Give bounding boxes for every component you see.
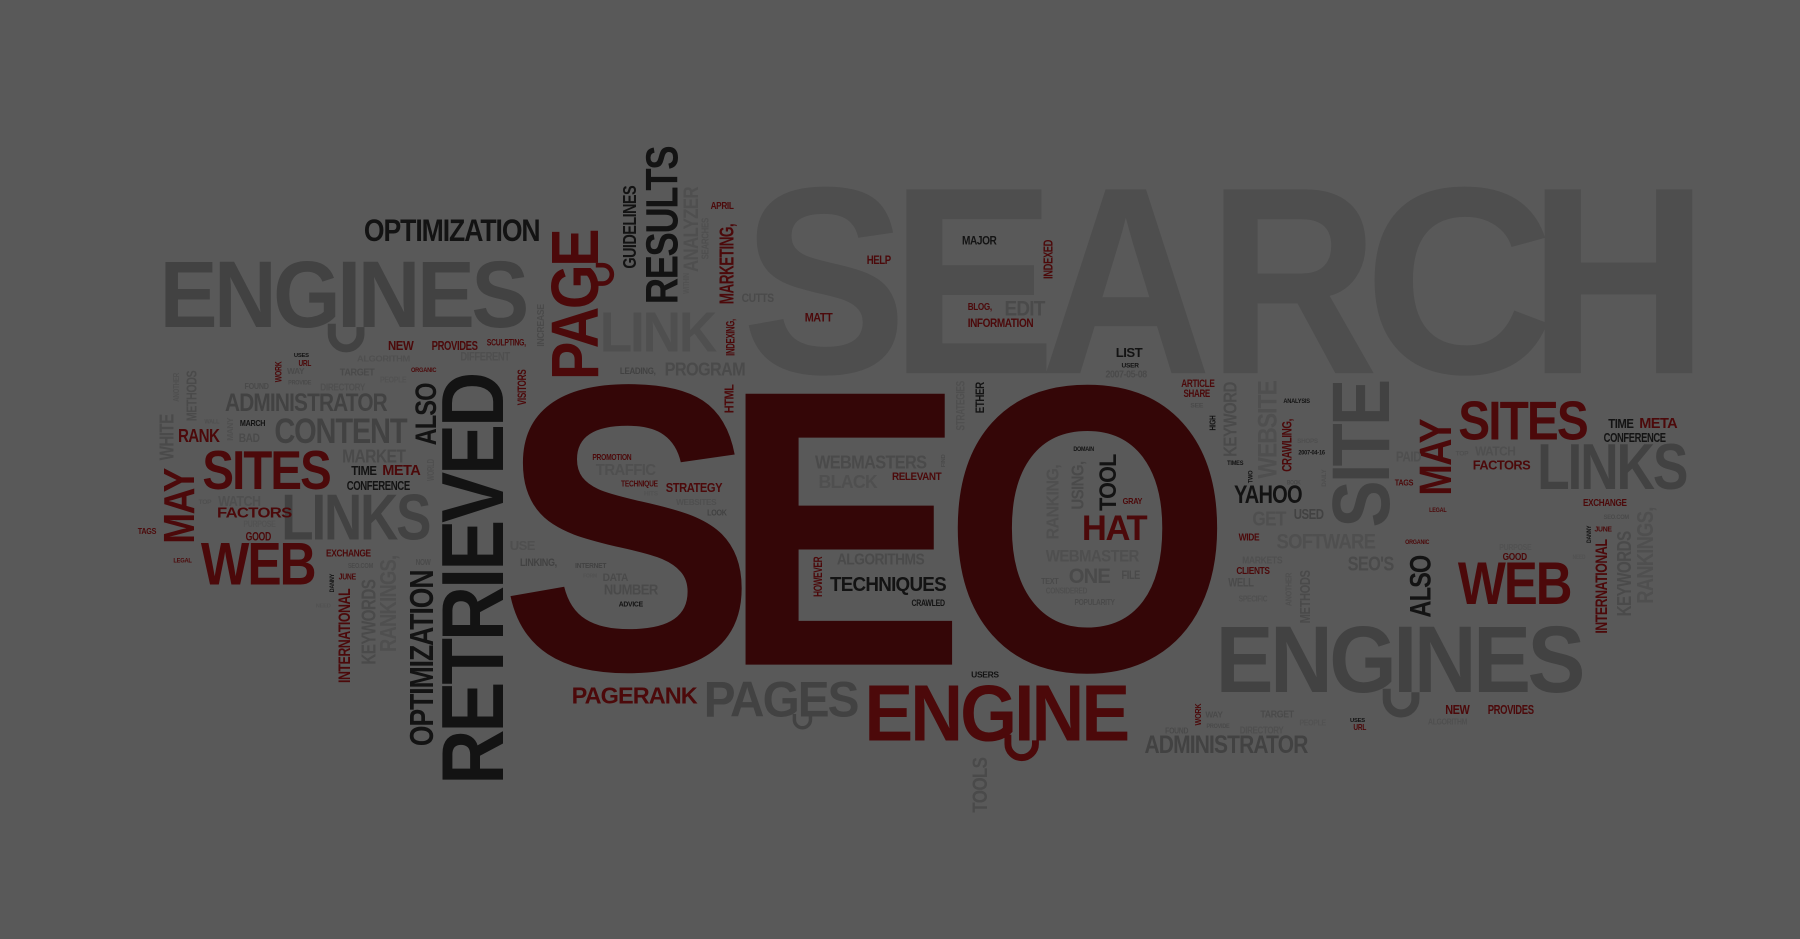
- cluster: top middle words: PROGRAM: [665, 358, 745, 379]
- cluster: right words: WELL: [1228, 577, 1254, 590]
- cluster: right words: PAID: [1396, 448, 1422, 465]
- cluster: right words: METHODS: [1297, 570, 1314, 623]
- cluster: words inside O: TEXT: [1041, 576, 1059, 586]
- cluster: words inside E: CRAWLED: [911, 598, 945, 608]
- cluster: right words: TWO: [1247, 471, 1254, 483]
- cluster: top middle words: CUTTS: [742, 292, 774, 305]
- cluster: lower right words: PROVIDE: [1206, 723, 1230, 730]
- cluster: left words: NEED: [316, 603, 331, 609]
- cluster: right words: META: [1639, 415, 1678, 432]
- cluster: right words: 2007-04-16: [1298, 450, 1325, 457]
- cluster: left words: DIFFERENT: [460, 350, 511, 363]
- cluster: right words: ANALYSIS: [1283, 398, 1311, 405]
- cluster: left words: PROVIDES: [432, 338, 478, 353]
- word: ENGINES right: ENGINES: [1216, 607, 1582, 713]
- cluster: right words: ORGANIC: [1405, 539, 1430, 546]
- cluster: right words: ANOTHER: [1283, 573, 1293, 606]
- word: LINK: LINK: [600, 301, 717, 364]
- cluster: left words: FACTORS: [217, 505, 292, 522]
- cluster: words inside E: TECHNIQUES: [830, 574, 946, 596]
- word: SEARCH: C: [1364, 132, 1550, 430]
- cluster: left words: BAD: [239, 432, 259, 445]
- cluster: top middle words: INFORMATION: [968, 317, 1033, 330]
- cluster: lower right words: WORK: [1193, 703, 1203, 725]
- cluster: right words: BOOK: [1287, 479, 1301, 486]
- cluster: lower right words: USES: [1350, 718, 1365, 724]
- cluster: right words: HIGH: [1208, 415, 1218, 430]
- word: ADMINISTRATOR right: ADMINISTRATOR: [1145, 731, 1308, 759]
- cluster: right words: WEBSITE: [1253, 381, 1283, 479]
- cluster: words inside S: WEBSITES: [676, 497, 717, 507]
- cluster: left words: METHODS: [183, 370, 200, 421]
- cluster: words inside O: TOOL: [1095, 454, 1122, 511]
- cluster: top middle words: GUIDELINES: [619, 186, 640, 269]
- cluster: left words: RANKINGS,: [375, 556, 401, 652]
- word: MAY right: MAY: [1410, 418, 1461, 496]
- cluster: left words: WALL: [204, 419, 219, 426]
- word: SITE: SITE: [1316, 381, 1407, 527]
- cluster: left words: PROVIDE: [288, 380, 312, 387]
- cluster: words inside O: GRAY: [1123, 496, 1143, 506]
- cluster: left words: TAGS: [138, 526, 157, 536]
- cluster: top middle words: EDIT: [1004, 296, 1046, 321]
- word: ADMINISTRATOR left: ADMINISTRATOR: [225, 389, 388, 417]
- cluster: lower right words: PROVIDES: [1488, 702, 1534, 717]
- word: SEARCH: R: [1208, 133, 1374, 430]
- cluster: top middle words: WITHIN: [681, 273, 691, 294]
- cluster: left words: RANK: [178, 425, 220, 446]
- word: YAHOO: YAHOO: [1234, 481, 1302, 509]
- cluster: right words: KEYWORD: [1219, 382, 1240, 457]
- cluster: top middle words: MARKETING,: [717, 224, 739, 304]
- cluster: words inside O: WEBMASTER: [1046, 546, 1139, 565]
- cluster: left words: TIME: [351, 463, 377, 478]
- cluster: left words: SEO.COM: [348, 561, 373, 570]
- cluster: left words: ALGORITHM: [357, 354, 410, 364]
- cluster: words inside S: [510, 452, 727, 609]
- word: SEO: O: [942, 300, 1222, 756]
- cluster: words inside S: FORM: [583, 573, 597, 579]
- cluster: words inside E: FIND: [941, 455, 947, 467]
- cluster: right words: SEE: [1190, 403, 1204, 410]
- cluster: left words: FOUND: [245, 381, 269, 391]
- cluster: left words: KEYWORDS: [358, 579, 380, 665]
- cluster: words inside E: ALGORITHMS: [837, 551, 924, 568]
- cluster: left words: MANY: [225, 417, 235, 441]
- cluster: right words: SPECIFIC: [1239, 594, 1268, 604]
- cluster: left words: USES: [294, 353, 309, 359]
- cluster: right words: INTERNATIONAL: [1592, 539, 1611, 634]
- cluster: right words: FACTORS: [1473, 457, 1531, 472]
- word: RESULTS: RESULTS: [636, 146, 687, 304]
- cluster: top middle words: SEARCHES: [700, 218, 711, 259]
- word: RETRIEVED: RETRIEVED: [423, 374, 522, 785]
- word: SITES right: SITES: [1458, 390, 1587, 452]
- cluster: top middle words: INDEXED: [1041, 239, 1056, 279]
- cluster: right words: USED: [1294, 506, 1324, 523]
- cluster: words inside E: USERS: [971, 669, 999, 679]
- word: ALSO right: ALSO: [1404, 555, 1437, 618]
- cluster: top middle words: LEADING,: [620, 366, 655, 376]
- cluster: right words: SHOPS: [1297, 438, 1319, 445]
- cluster: lower right words: ALGORITHM: [1428, 716, 1467, 726]
- cluster: top middle words: INDEXING,: [725, 319, 738, 356]
- cluster: left words: MARKET: [342, 446, 407, 467]
- cluster: left words: DANNY: [329, 573, 336, 592]
- cluster: right words: MARKETS: [1242, 556, 1283, 567]
- cluster: left words: WAY: [287, 366, 305, 376]
- cluster: right words: TIME: [1608, 416, 1634, 431]
- cluster: words inside O: RANKING,: [1042, 465, 1062, 540]
- cluster: lower right words: DIRECTORY: [1240, 726, 1284, 737]
- cluster: words inside E: TOOLS: [967, 757, 992, 813]
- cluster: words inside O: ONE: [1069, 563, 1110, 588]
- cluster: words inside S: INTERNET: [575, 561, 607, 570]
- cluster: right words: NEED: [1573, 554, 1586, 561]
- word: ALSO left: ALSO: [410, 383, 443, 445]
- cluster: words inside S: DATA: [603, 572, 628, 584]
- cluster: words inside S: STRATEGY: [666, 481, 723, 495]
- cluster: left words: TOP: [199, 499, 212, 506]
- cluster: words inside S: HITS: [644, 491, 659, 498]
- cluster: words inside S: PROMOTION: [592, 452, 632, 462]
- word: SEARCH: E: [890, 131, 1050, 430]
- cluster: right words: SHARE: [1184, 388, 1210, 400]
- word: SEARCH: [742, 131, 1699, 430]
- cluster: right words: KEYWORDS: [1614, 531, 1636, 616]
- cluster: lower right words: [1165, 702, 1534, 737]
- cluster: left words: NEW: [388, 338, 414, 353]
- word: WEB right: WEB: [1458, 550, 1570, 617]
- cluster: right words: CLIENTS: [1236, 566, 1270, 577]
- cluster: top middle words: MAJOR: [962, 235, 997, 248]
- cluster: top middle words: USER: [1122, 362, 1139, 369]
- cluster: top middle words: INCREASE: [536, 304, 547, 347]
- cluster: right words: WATCH: [1475, 444, 1515, 459]
- word: SEO: E: [721, 308, 957, 748]
- cluster: top middle words: VISITORS: [516, 369, 529, 405]
- cluster: left words: MARCH: [240, 418, 265, 428]
- cluster: lower right words: WAY: [1205, 709, 1223, 719]
- cluster: top middle words: 2007-05-08: [1105, 370, 1148, 381]
- cluster: left words: ANOTHER: [171, 373, 181, 402]
- word: ENGINES left: ENGINES: [160, 242, 526, 348]
- word: LINKS left: LINKS: [281, 481, 430, 554]
- cluster: words inside O: POPULARITY: [1074, 597, 1115, 607]
- cluster: left words: PURPOSE: [243, 519, 276, 529]
- cluster: right words: CRAWLING,: [1279, 419, 1295, 472]
- cluster: top middle words: MATT: [805, 311, 833, 324]
- cluster: left words: INTERNATIONAL: [335, 589, 354, 683]
- cluster: left words: META: [382, 462, 421, 479]
- cluster: right words: SEO'S: [1348, 554, 1394, 576]
- cluster: left words: URL: [298, 358, 311, 368]
- cluster: left words: TARGET: [340, 367, 375, 378]
- cluster: right words: SEO.COM: [1604, 514, 1630, 521]
- cluster: words inside S: ADVICE: [619, 600, 643, 609]
- cluster: right words: WIDE: [1239, 533, 1260, 544]
- cluster: right words: LEGAL: [1429, 507, 1447, 514]
- word: PAGE: PAGE: [539, 231, 613, 380]
- word: SEO: [499, 300, 1222, 757]
- cluster: right words: DAILY: [1321, 469, 1328, 487]
- cluster: top middle words: [516, 186, 1148, 413]
- word: SEO: S: [499, 300, 747, 757]
- cluster: left words: ORGANIC: [411, 367, 437, 374]
- cluster: words inside E: WEBMASTERS: [815, 451, 927, 472]
- cluster: lower right words: PEOPLE: [1299, 717, 1327, 727]
- word: OPTIMIZATION top: OPTIMIZATION: [364, 212, 540, 248]
- cluster: words inside E: ETHER: [974, 381, 987, 413]
- cluster: words inside S: LINKING,: [520, 557, 557, 569]
- cluster: left words: WORK: [273, 361, 283, 382]
- cluster: right words: CONFERENCE: [1604, 430, 1666, 445]
- word: PAGES: PAGES: [704, 671, 858, 727]
- cluster: right words: TOP: [1456, 451, 1469, 458]
- cluster: top middle words: HTML: [722, 384, 737, 413]
- cluster: left words: JUNE: [339, 572, 356, 582]
- word: ENGINE: ENGINE: [864, 667, 1128, 757]
- cluster: left words: DIRECTORY: [320, 382, 366, 393]
- cluster: left words: WATCH: [218, 493, 261, 510]
- cluster: top middle words: BLOG,: [968, 302, 992, 313]
- cluster: lower right words: TARGET: [1260, 709, 1294, 720]
- cluster: top middle words: HELP: [867, 254, 891, 267]
- cluster: left words: LEGAL: [173, 557, 192, 564]
- word: SITES left: SITES: [202, 439, 330, 501]
- word: SEARCH: S: [742, 132, 901, 430]
- cluster: words inside O: USING,: [1068, 461, 1088, 510]
- word: WEB left: WEB: [201, 530, 315, 597]
- cluster: left words: PEOPLE: [380, 374, 407, 384]
- cluster: left words: CONFERENCE: [347, 478, 410, 493]
- cluster: words inside S: NUMBER: [604, 582, 658, 599]
- cluster: right words: [1145, 378, 1686, 759]
- cluster: left words: NOW: [416, 557, 431, 567]
- cluster: left words: WORLD: [426, 459, 437, 481]
- word: CONTENT: CONTENT: [274, 412, 407, 451]
- cluster: top middle words: LIST: [1116, 345, 1143, 360]
- cluster: right words: EXCHANGE: [1583, 498, 1627, 509]
- word: PAGERANK: PAGERANK: [572, 683, 698, 709]
- cluster: top middle words: APRIL: [711, 201, 734, 212]
- cluster: right words: ARTICLE: [1181, 378, 1215, 390]
- cluster: words inside O: CONSIDERED: [1046, 585, 1087, 595]
- word: SEARCH: A: [1040, 131, 1206, 430]
- cluster: lower right words: URL: [1353, 722, 1366, 732]
- word: MAY left: MAY: [156, 468, 204, 544]
- cluster: words inside S: TRAFFIC: [596, 462, 656, 479]
- cluster: lower right words: FOUND: [1165, 726, 1188, 736]
- cluster: words inside O: FILE: [1122, 569, 1140, 582]
- word: LINKS right: LINKS: [1537, 430, 1686, 503]
- cluster: words inside O: [1041, 446, 1147, 607]
- cluster: right words: GET: [1252, 509, 1286, 531]
- cluster: right words: TAGS: [1395, 478, 1414, 488]
- cluster: left words: SCULPTING,: [487, 338, 526, 348]
- cluster: left words: GOOD: [246, 531, 271, 544]
- cluster: right words: JUNE: [1594, 524, 1612, 533]
- cluster: words inside S: LOOK: [707, 507, 727, 517]
- cluster: right words: SOFTWARE: [1277, 529, 1376, 554]
- cluster: right words: PURPOSE: [1499, 542, 1532, 552]
- cluster: left words: EXCHANGE: [326, 549, 371, 560]
- cluster: words inside E: STRATEGIES: [954, 381, 967, 430]
- cluster: words inside S: TECHNIQUE: [621, 479, 658, 489]
- cluster: left words: [138, 338, 526, 746]
- cluster: words inside O: DOMAIN: [1073, 446, 1094, 453]
- word: SEARCH: H: [1528, 131, 1699, 430]
- cluster: words inside E: HOWEVER: [812, 556, 825, 597]
- word: OPTIMIZATION vertical: OPTIMIZATION: [404, 571, 441, 746]
- cluster: right words: GOOD: [1503, 552, 1527, 563]
- cluster: right words: DANNY: [1586, 525, 1593, 543]
- cluster: words inside E: RELEVANT: [892, 471, 942, 483]
- cluster: top middle words: ANALYZER: [678, 186, 703, 272]
- cluster: words inside E: [812, 381, 999, 813]
- cluster: left words: WHITE: [156, 414, 178, 460]
- cluster: words inside O: HAT: [1082, 509, 1147, 548]
- cluster: words inside E: BLACK: [818, 471, 878, 492]
- cluster: words inside S: USE: [510, 538, 536, 553]
- cluster: lower right words: NEW: [1445, 702, 1470, 717]
- cluster: right words: RANKINGS,: [1632, 507, 1658, 604]
- cluster: right words: TIMES: [1227, 460, 1244, 467]
